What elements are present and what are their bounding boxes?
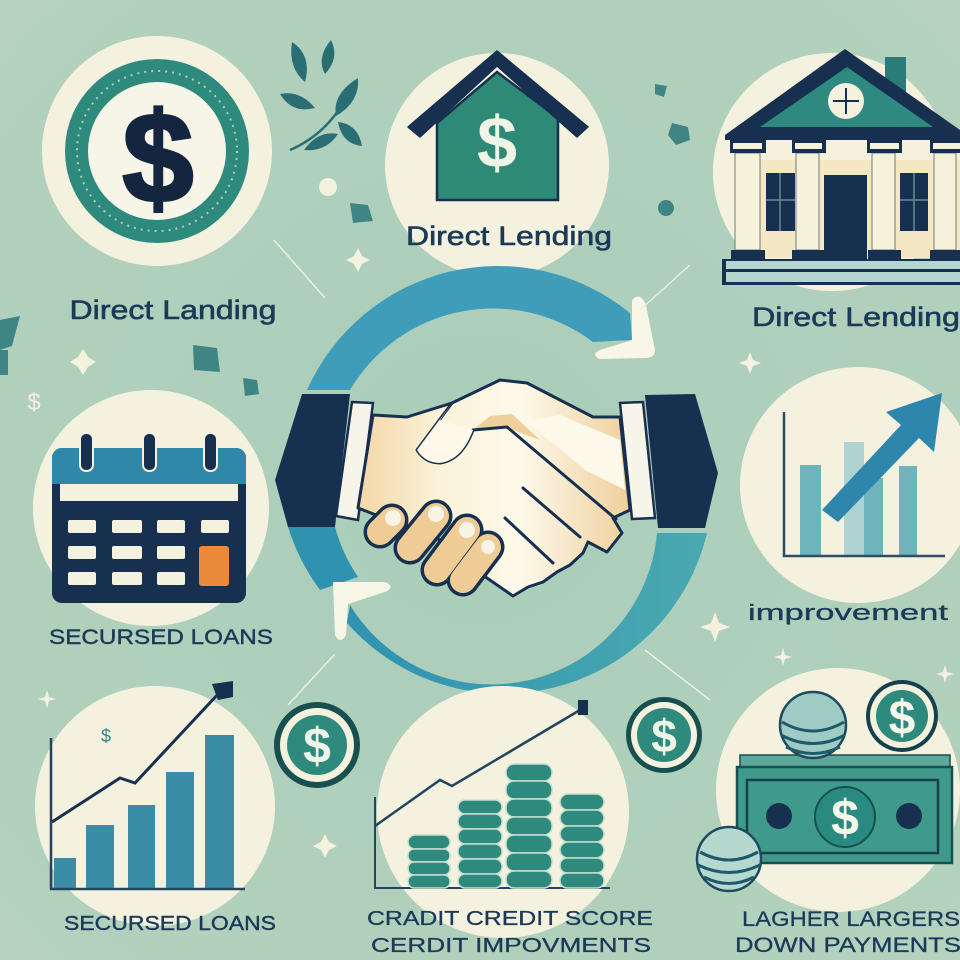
panel: dollar coin circle — [42, 36, 272, 266]
panel: house: $ — [477, 103, 517, 183]
icon: small coin centre — [626, 697, 702, 773]
label: improvement: improvement — [748, 600, 948, 625]
icon: small coin centre: $ — [651, 710, 677, 762]
panel: rising bar chart: $ — [101, 726, 111, 746]
label: secured loans left: SECURSED LOANS — [49, 626, 273, 649]
panel: rising bar chart — [35, 681, 275, 926]
label: larger down payments: LAGHER LARGERS — [742, 908, 960, 931]
label: credit score: CRADIT CREDIT SCORE — [367, 908, 653, 930]
top coin — [780, 692, 846, 758]
panel: cash and coins — [697, 668, 960, 912]
panel: coin stacks chart — [375, 686, 629, 938]
panel: dollar coin circle: $ — [122, 87, 194, 230]
panel: cash and coins: $ — [889, 692, 916, 745]
panel: cash and coins: $ — [831, 790, 859, 846]
label: direct lending right: Direct Lending — [752, 302, 960, 332]
decorative sparkles and fragments: $ — [27, 389, 41, 416]
left hand fingers — [380, 516, 488, 580]
icon: small coin left: $ — [303, 718, 331, 774]
label: larger down payments — [735, 908, 960, 957]
panel: improvement chart — [740, 367, 960, 603]
panel: bank building — [713, 49, 960, 291]
central cycle ring — [288, 266, 707, 694]
panel: calendar — [33, 390, 269, 626]
label: secured loans bottom left: SECURSED LOANS — [64, 913, 276, 935]
panel: house — [385, 51, 609, 277]
label: direct lending centre: Direct Lending — [406, 221, 612, 251]
label: credit score: CERDIT IMPOVMENTS — [371, 935, 651, 957]
label: credit score — [367, 908, 653, 957]
icon: handshake — [275, 380, 718, 596]
connector lines — [274, 240, 710, 705]
icon: small coin left — [274, 702, 360, 788]
icon: leaves — [280, 40, 362, 150]
label: direct landing left: Direct Landing — [70, 295, 276, 325]
label: larger down payments: DOWN PAYMENTS — [735, 934, 960, 957]
left coin — [697, 827, 761, 891]
